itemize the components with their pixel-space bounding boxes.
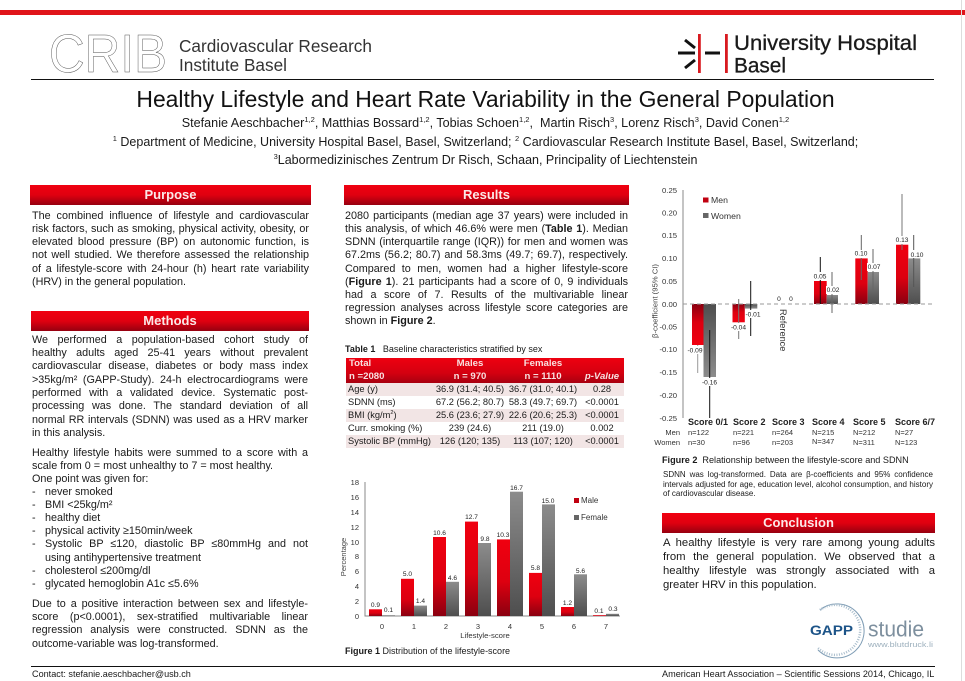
figure 2 bar chart: 0.15 bbox=[662, 231, 677, 240]
table header row bbox=[346, 358, 624, 383]
row: smoking: 239 (24.6) bbox=[449, 423, 491, 433]
figure 2 bar chart: 0.07 bbox=[868, 264, 881, 271]
row: BMI: 25.6 (23.6; 27.9) bbox=[436, 410, 504, 420]
results text: Compared to men, women had a higher lifestyle-score bbox=[345, 263, 628, 275]
header: CRIB logo: Cardiovascular Research bbox=[179, 36, 372, 56]
purpose text: not well studied. We therefore assessed the relationship bbox=[32, 249, 309, 261]
methods text: - bbox=[32, 499, 36, 511]
row: SDNN bbox=[348, 397, 619, 407]
methods text: outcome-variable was log-transformed. bbox=[32, 638, 219, 650]
methods text: - bbox=[32, 512, 36, 524]
row: BMI: BMI (kg/m2) bbox=[348, 410, 397, 420]
figure 2 bar chart: -0.10 bbox=[659, 345, 677, 354]
figure 1 bar chart: 5 bbox=[540, 622, 544, 631]
figure 1 bar chart: Percentage bbox=[339, 538, 348, 576]
title: Healthy Lifestyle and Heart Rate Variability in the General Population bbox=[136, 86, 835, 112]
results text: regression analyses across lifestyle score categories are bbox=[345, 302, 628, 314]
methods text: glycated hemoglobin A1c ≤5.6% bbox=[45, 578, 199, 590]
row: smoking: Curr. smoking (%) bbox=[348, 423, 422, 433]
conclusion text: healthy lifestyle was strongly associated with a bbox=[663, 565, 935, 577]
logo: GAPP studie: www.blutdruck.li bbox=[867, 640, 933, 649]
figure 1 bar chart: 18 bbox=[351, 478, 359, 487]
row: age: 0.28 bbox=[593, 384, 611, 394]
figure 2 bar chart: -0.04 bbox=[731, 324, 746, 332]
row: smoking bbox=[348, 423, 614, 433]
figure 1 bar chart: 16 bbox=[351, 493, 359, 502]
figure 2 bar chart: N=311 bbox=[853, 438, 875, 447]
results text: this analysis, of which 46.6% were men (Table 1). Median bbox=[345, 223, 628, 235]
results text: 2080 participants (median age 37 years) were included in bbox=[345, 210, 628, 222]
figure 1 bar chart: 8 bbox=[355, 552, 359, 561]
conclusion heading: Conclusion bbox=[763, 515, 834, 530]
figure 2 bar chart: 0.10 bbox=[911, 252, 924, 259]
row: BMI: <0.0001 bbox=[585, 410, 619, 420]
table header row: n = 1110 bbox=[524, 370, 562, 382]
table 1 bbox=[346, 358, 624, 448]
figure 2 bar chart: n=122 bbox=[688, 428, 709, 437]
methods text: >35kg/m² (GAPP-Study). 24-h electrocardiograms were bbox=[32, 374, 308, 386]
figure 2 bar chart: Score 4 bbox=[812, 417, 845, 427]
figure 2 note: of cardiovascular disease. bbox=[663, 489, 756, 498]
methods text: never smoked bbox=[45, 486, 113, 498]
figure 2 bar chart: 0.10 bbox=[662, 254, 677, 263]
figure 1 bar chart: 4 bbox=[508, 622, 512, 631]
figure 2 bar chart: Men bbox=[711, 195, 728, 205]
conclusion text: greater HRV in this population. bbox=[663, 579, 817, 591]
methods text: BMI <25kg/m² bbox=[45, 499, 113, 511]
figure 2 bar chart: β-coefficient (95% CI) bbox=[650, 264, 660, 338]
methods text: regression analysis were constructed. SDNN as the bbox=[32, 624, 308, 636]
row: age: 36.7 (31.0; 40.1) bbox=[509, 384, 577, 394]
row: SDNN: 67.2 (56.2; 80.7) bbox=[436, 397, 504, 407]
table header row: n = 970 bbox=[454, 370, 486, 382]
affiliations: 3Labormedizinisches Zentrum Dr Risch, Schaan, Principality of Liechtenstein bbox=[274, 152, 697, 167]
affiliations: 1 Department of Medicine, University Hospital Basel, Basel, Switzerland; 2 Cardiovascular Research Institute Basel, Basel, Switzerland; bbox=[113, 134, 858, 149]
header: CRIB logo bbox=[49, 30, 372, 75]
figure 2 bar chart: Score 5 bbox=[853, 417, 886, 427]
results text: SDNN (interquartile range (IQR)) for men and women was bbox=[345, 236, 628, 248]
results text: shown in Figure 2. bbox=[345, 315, 436, 327]
figure 2 bar chart: N=212 bbox=[853, 428, 875, 437]
figure 2 bar chart: -0.25 bbox=[659, 414, 677, 423]
methods text: - bbox=[32, 565, 36, 577]
purpose text: The combined influence of lifestyle and cardiovascular bbox=[32, 210, 309, 222]
figure 2 bar chart: -0.09 bbox=[687, 348, 703, 354]
row: smoking: 211 (19.0) bbox=[522, 423, 564, 433]
purpose text bbox=[32, 210, 309, 288]
figure 2 bar chart: n=96 bbox=[733, 438, 750, 447]
figure 2 bar chart: 0.20 bbox=[662, 208, 677, 218]
figure 1 bar chart: 6 bbox=[572, 622, 576, 631]
row: systolic BP: 113 (107; 120) bbox=[513, 436, 573, 446]
row: BMI bbox=[346, 409, 624, 422]
purpose heading: Purpose bbox=[144, 187, 196, 202]
figure 1 bar chart: 0 bbox=[380, 622, 384, 631]
figure 2 caption: Figure 2 Relationship between the lifestyle-score and SDNN bbox=[662, 455, 909, 465]
figure 1 bar chart: Female bbox=[581, 513, 608, 522]
header rule bbox=[31, 78, 934, 80]
figure 2 bar chart: 0.02 bbox=[827, 287, 840, 294]
methods text: Healthy lifestyle habits were summed to a score with a bbox=[32, 447, 308, 459]
figure 2 bar chart: N=215 bbox=[812, 428, 834, 437]
figure 1 bar chart: Lifestyle-score bbox=[460, 631, 510, 640]
row: SDNN: <0.0001 bbox=[585, 397, 619, 407]
figure 1 bar chart: 2 bbox=[444, 622, 448, 631]
figure 1 caption: Figure 1 Distribution of the lifestyle-score bbox=[345, 646, 510, 656]
figure 1 bar chart: 10.3 bbox=[497, 532, 510, 539]
figure 2 bar chart: Score 2 bbox=[733, 417, 766, 427]
methods text: Systolic BP ≤120, diastolic BP ≤80mmHg and not bbox=[45, 538, 308, 550]
purpose text: of a lifestyle-score with 24-hour (h) heart rate variability bbox=[32, 263, 309, 275]
methods text: scale from 0 = most unhealthy to 7 = most healthy. bbox=[32, 460, 273, 472]
figure 1 bar chart: 0.9 bbox=[371, 602, 380, 609]
figure 1 bar chart: 0.3 bbox=[608, 606, 618, 613]
panel: results bbox=[344, 185, 629, 327]
conclusion text: A healthy lifestyle is very rare among young adults bbox=[663, 537, 935, 549]
methods text: processing was done. The standard deviation of all bbox=[32, 400, 308, 412]
conclusion text: from the general population. We observed that a bbox=[663, 551, 935, 563]
methods text: performed with a validated device. Systematic post- bbox=[32, 387, 308, 399]
figure 2 bar chart: n=203 bbox=[772, 438, 793, 447]
figure 2 bar chart: 0.00 bbox=[662, 300, 677, 309]
methods text: score (p<0.0001), sex-stratified multivariable linear bbox=[32, 611, 308, 623]
figure 2 bar chart: Score 0/1 bbox=[688, 417, 728, 427]
figure 1 bar chart: 1 bbox=[412, 622, 416, 631]
figure 1 bar chart: 0.1 bbox=[384, 607, 393, 614]
figure 2 bar chart: 0 bbox=[789, 296, 793, 303]
figure 2 bar chart: 0.05 bbox=[814, 274, 827, 280]
methods text: - bbox=[32, 486, 36, 498]
figure 2 bar chart: N=27 bbox=[895, 428, 913, 437]
figure 2 note: intervals adjusted for age, education level, alcohol consumption, and history bbox=[663, 480, 933, 488]
methods text: using antihypertensive treatment bbox=[45, 552, 201, 564]
figure 2 bar chart: 0 bbox=[777, 296, 781, 303]
figure 1 bar chart: Male bbox=[581, 496, 599, 505]
figure 1 bar chart: 9.8 bbox=[480, 536, 490, 543]
figure 1 bar chart: 2 bbox=[355, 597, 359, 606]
figure 1 bar chart: 14 bbox=[351, 508, 359, 517]
results heading: Results bbox=[463, 187, 510, 202]
purpose text: elevated blood pressure (BP) on autonomic function, is bbox=[32, 236, 309, 248]
figure 1 bar chart: 16.7 bbox=[510, 485, 523, 492]
figure 2 bar chart: n=264 bbox=[772, 428, 793, 437]
table 1 caption: Table 1 Baseline characteristics stratified by sex bbox=[345, 344, 542, 354]
panel: purpose bbox=[30, 185, 311, 288]
figure 1 bar chart: 12.7 bbox=[465, 514, 478, 521]
figure 1 bar chart: 7 bbox=[604, 622, 608, 631]
logo: GAPP studie bbox=[810, 603, 933, 658]
purpose heading bbox=[30, 185, 311, 205]
figure 2 bar chart: 0.13 bbox=[896, 237, 909, 244]
figure 1 bar chart: 15.0 bbox=[542, 498, 555, 505]
figure 1 bar chart: 12 bbox=[351, 523, 359, 532]
results text bbox=[345, 210, 628, 327]
methods text: - bbox=[32, 538, 36, 550]
figure 1 bar chart: 5.6 bbox=[576, 568, 585, 575]
figure 2 bar chart: -0.16 bbox=[702, 380, 717, 386]
figure 1 bar chart: 6 bbox=[355, 567, 359, 576]
methods heading: Methods bbox=[143, 313, 197, 328]
row: age: 36.9 (31.4; 40.5) bbox=[436, 384, 504, 394]
row: systolic BP bbox=[346, 435, 624, 448]
row: age bbox=[346, 383, 624, 396]
figure 2 bar chart: n=30 bbox=[688, 438, 705, 447]
figure 2 bar chart: -0.05 bbox=[659, 322, 677, 332]
figure 2 bar chart: Women bbox=[711, 211, 741, 221]
figure 1 bar chart: 0.1 bbox=[594, 608, 604, 615]
row: BMI: 22.6 (20.6; 25.3) bbox=[509, 410, 577, 420]
logo: GAPP studie: studie bbox=[868, 616, 924, 642]
panel: methods bbox=[31, 311, 309, 650]
results text: (Figure 1). 21 participants had a score of 0, 9 individuals bbox=[345, 276, 628, 288]
table header row: Total bbox=[349, 358, 371, 369]
conclusion heading bbox=[662, 513, 935, 533]
methods text: - bbox=[32, 525, 36, 537]
table header row: Males bbox=[457, 358, 483, 369]
figure 2 bar chart: Reference bbox=[778, 309, 788, 351]
methods text: physical activity ≥150min/week bbox=[45, 525, 193, 537]
figure 2 bar chart: -0.20 bbox=[659, 391, 677, 400]
figure 2 bar chart: -0.15 bbox=[659, 368, 677, 377]
figure 1 bar chart: 5.8 bbox=[531, 565, 540, 572]
figure 2 bar chart: N=347 bbox=[812, 437, 834, 446]
footer rule bbox=[31, 666, 935, 667]
row: systolic BP: <0.0001 bbox=[585, 436, 619, 446]
figure 1 bar chart: 1.2 bbox=[563, 600, 572, 607]
figure 1 bar chart: 5.0 bbox=[403, 571, 412, 578]
row: age: Age (y) bbox=[348, 384, 378, 394]
results heading bbox=[344, 185, 629, 205]
purpose text: (HRV) in the general population. bbox=[32, 276, 186, 288]
table header row: p-Value bbox=[585, 370, 619, 382]
header: CRIB logo: Institute Basel bbox=[179, 55, 287, 75]
figure 2 note bbox=[663, 470, 933, 498]
row: systolic BP: Systolic BP (mmHg) bbox=[348, 436, 431, 446]
methods text: - bbox=[32, 578, 36, 590]
methods text: normal RR intervals (SDNN) was used as a HRV marker bbox=[32, 414, 308, 426]
figure 1 bar chart: 3 bbox=[476, 622, 480, 631]
figure 2 bar chart: 0.25 bbox=[662, 186, 677, 195]
row: smoking: 0.002 bbox=[590, 423, 614, 433]
methods text: We performed a population-based cohort study of bbox=[32, 334, 308, 346]
results text: had a score of 7. Results of the multivariable linear bbox=[345, 289, 628, 301]
methods text: healthy adults aged 25-41 years without prevalent bbox=[32, 347, 308, 359]
figure 2 bar chart: 0.10 bbox=[855, 250, 868, 258]
figure 2 bar chart: n=221 bbox=[733, 428, 754, 437]
figure 2 bar chart: N=123 bbox=[895, 438, 917, 447]
methods text: cardiovascular disease, diabetes or body mass index bbox=[32, 360, 308, 372]
header: University Hospital Basel logo: University Hospital bbox=[734, 32, 917, 55]
methods text: One point was given for: bbox=[32, 473, 148, 485]
purpose text: risk factors, such as smoking, physical activity, obesity, or bbox=[32, 223, 309, 235]
figure 1 bar chart: 1.4 bbox=[416, 598, 425, 605]
conference: American Heart Association – Scientific Sessions 2014, Chicago, IL bbox=[662, 669, 934, 679]
figure 2 note: SDNN was log-transformed. Data are β-coefficients and 95% confidence bbox=[663, 470, 933, 479]
table header row: Females bbox=[524, 358, 562, 369]
figure 1 bar chart: 4.6 bbox=[448, 575, 457, 582]
authors: Stefanie Aeschbacher1,2, Matthias Bossard1,2, Tobias Schoen1,2, Martin Risch3, Lorenz Risch3, David Conen1,2 bbox=[182, 115, 789, 130]
logo: GAPP studie: GAPP bbox=[810, 623, 853, 639]
header: University Hospital Basel logo bbox=[678, 32, 917, 76]
methods text bbox=[32, 334, 308, 650]
figure 2 bar chart: 0.05 bbox=[662, 277, 677, 286]
figure 2 bar chart: Men bbox=[665, 428, 680, 437]
table header row: n =2080 bbox=[349, 370, 384, 382]
panel: conclusion bbox=[662, 513, 936, 591]
figure 2 bar chart: Score 3 bbox=[772, 417, 805, 427]
methods text: in this analysis. bbox=[32, 427, 105, 439]
affiliations bbox=[113, 134, 858, 167]
figure 1 bar chart: 10 bbox=[351, 538, 359, 547]
figure 2 bar chart: Women bbox=[654, 438, 680, 447]
top red bar bbox=[0, 10, 965, 15]
row: SDNN: SDNN (ms) bbox=[348, 397, 396, 407]
figure 1 bar chart: 4 bbox=[355, 582, 359, 591]
row: systolic BP: 126 (120; 135) bbox=[440, 436, 500, 446]
figure 1 bar chart: 0 bbox=[355, 612, 359, 621]
right page edge bbox=[961, 0, 962, 681]
row: SDNN: 58.3 (49.7; 69.7) bbox=[509, 397, 577, 407]
figure 2 bar chart: Score 6/7 bbox=[895, 417, 935, 427]
methods text: cholesterol ≤200mg/dl bbox=[45, 565, 151, 577]
methods text: Due to a positive interaction between sex and lifestyle- bbox=[32, 598, 308, 610]
results text: 67.2ms (56.2; 80.7) and 58.3ms (49.7; 69.7), respectively. bbox=[345, 249, 628, 261]
methods text: healthy diet bbox=[45, 512, 100, 524]
figure 2 bar chart: -0.01 bbox=[745, 312, 761, 318]
contact: Contact: stefanie.aeschbacher@usb.ch bbox=[32, 669, 191, 679]
methods heading bbox=[31, 311, 309, 331]
figure 1 bar chart: 10.6 bbox=[433, 530, 446, 537]
conclusion text bbox=[663, 537, 936, 591]
